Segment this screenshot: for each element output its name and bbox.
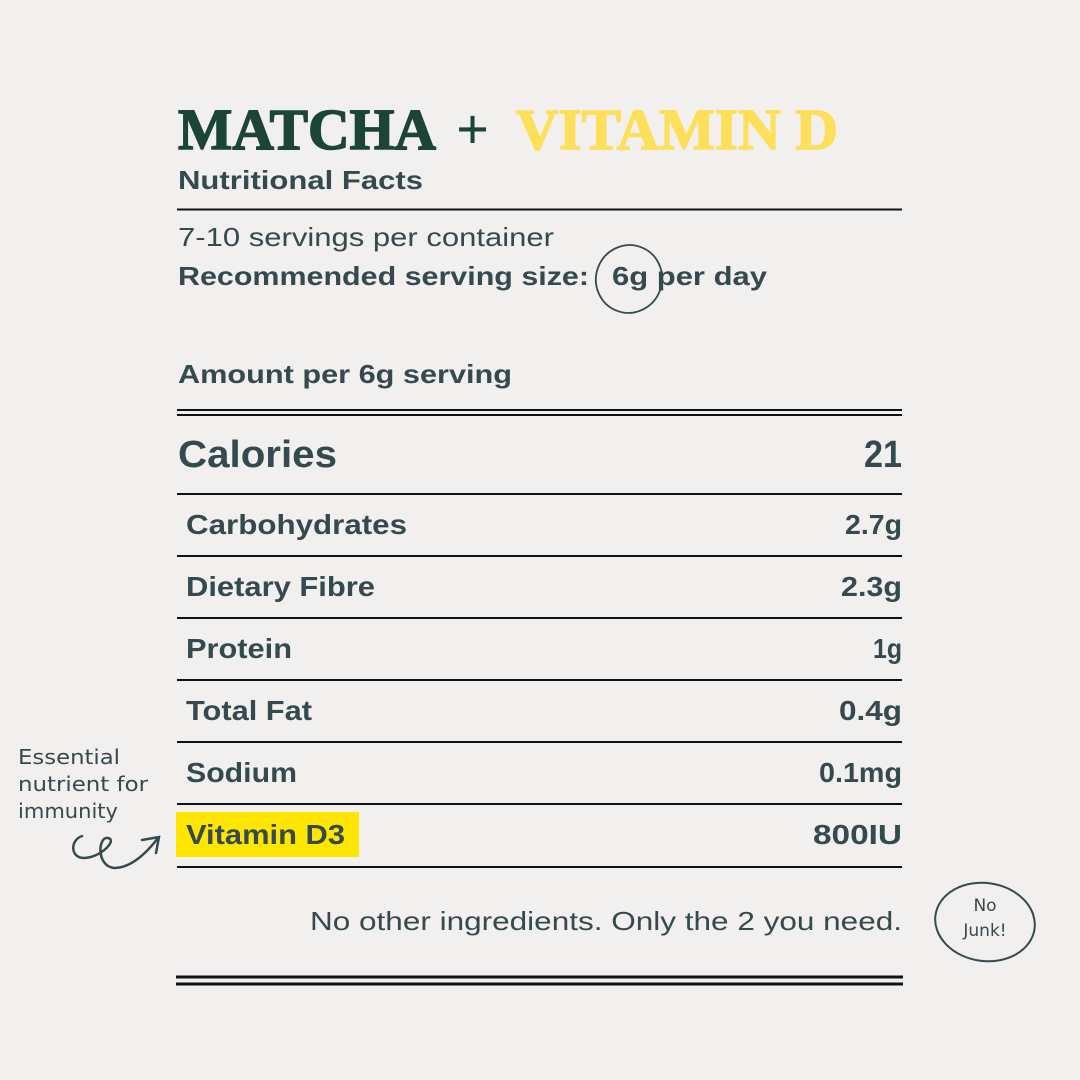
- calories: Calories: [178, 434, 337, 476]
- nutrient rows: 0.1mg: [819, 757, 902, 788]
- badge: no junk: [930, 876, 1040, 968]
- nutrient rows: 2.7g: [845, 509, 902, 540]
- nutrient rows: Vitamin D3: [186, 819, 345, 850]
- nutrient rows: Sodium: [186, 757, 297, 788]
- annotation: essential nutrient: [18, 745, 149, 823]
- nutrient rows: 0.4g: [839, 695, 902, 726]
- highlight: [176, 812, 359, 857]
- arrow: [73, 836, 159, 868]
- servings text: [178, 222, 768, 291]
- title: MATCHA: [178, 97, 436, 162]
- badge: no junk: Junk!: [962, 921, 1007, 941]
- annotation: essential nutrient: immunity: [18, 799, 118, 823]
- nutrient rows: Protein: [186, 633, 292, 664]
- nutrient rows: Dietary Fibre: [186, 571, 375, 602]
- title: VITAMIN D: [516, 97, 838, 162]
- servings text: 6g per day: [612, 261, 768, 291]
- nutrient rows: Total Fat: [186, 695, 312, 726]
- nutrient rows: 800IU: [813, 819, 902, 850]
- circle around 6g: [586, 236, 672, 322]
- footer note: No other ingredients. Only the 2 you need.: [310, 906, 902, 936]
- title: [178, 97, 838, 162]
- nutrient rows: Carbohydrates: [186, 509, 407, 540]
- calories: [178, 434, 902, 476]
- badge: no junk: No: [973, 896, 997, 916]
- servings text: Recommended serving size:: [178, 261, 589, 291]
- annotation: essential nutrient: nutrient for: [18, 772, 149, 796]
- nutrient rows: [186, 509, 902, 850]
- annotation: essential nutrient: Essential: [18, 745, 120, 769]
- amount heading: Amount per 6g serving: [178, 359, 512, 389]
- servings text: 7-10 servings per container: [178, 222, 554, 252]
- nutrient rows: 1g: [873, 633, 902, 664]
- nutrient rows: 2.3g: [841, 571, 902, 602]
- title: +: [456, 97, 489, 162]
- calories: 21: [864, 434, 902, 476]
- subtitle: Nutritional Facts: [178, 165, 423, 195]
